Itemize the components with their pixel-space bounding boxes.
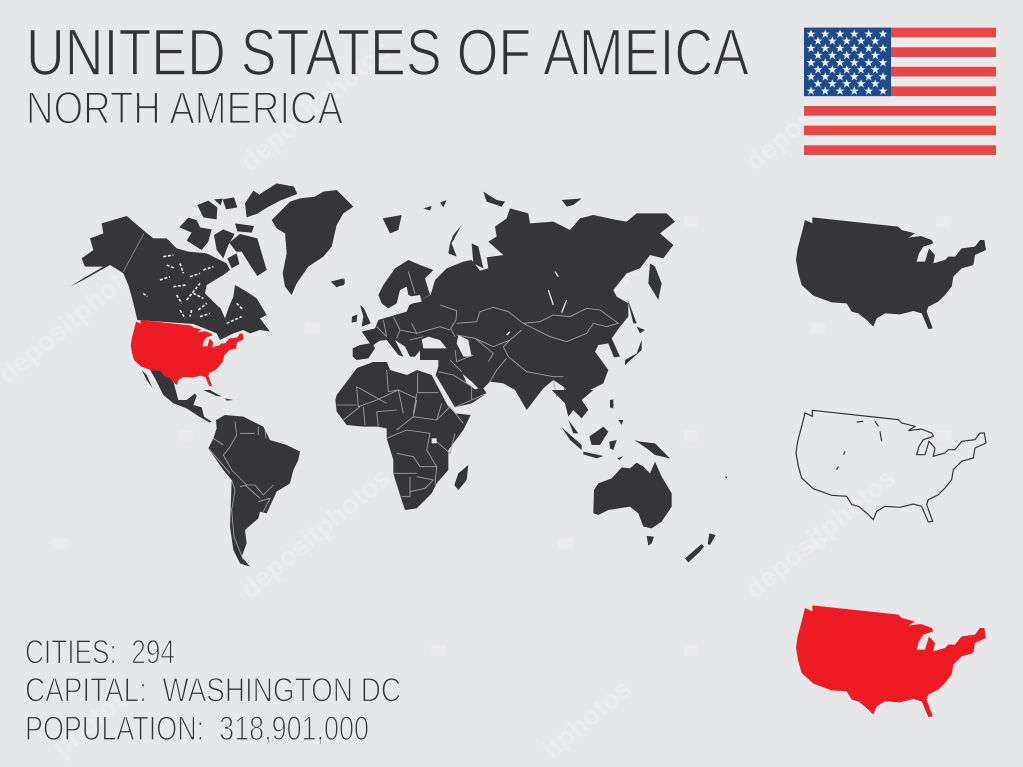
south america [208,415,300,567]
watermark: depositphotos [740,34,901,177]
africa [335,362,471,510]
world map [70,183,727,567]
north america [70,183,297,340]
southeast asia and oceania [552,390,727,562]
outlined usa silhouette [796,410,986,522]
title: UNITED STATES OF AMEICA [26,15,749,89]
subtitle: NORTH AMERICA [26,82,343,134]
watermark: itphotos [537,673,637,765]
eurasian islands [340,192,662,408]
greenland [272,190,353,295]
stat: cities: CITIES: 294 [25,634,175,672]
iceland [331,278,345,287]
new zealand [685,544,704,562]
watermark: photos [47,682,135,763]
tasmania [647,536,654,546]
flag [804,28,996,155]
stat: capital: CAPITAL: WASHINGTON DC [25,672,401,710]
solid dark usa silhouette [796,217,986,329]
highlighted: united states [131,320,244,386]
icon: lakes [143,255,243,323]
mexico and central america [142,367,233,423]
stat: population: POPULATION: 318,901,000 [25,710,369,748]
watermark: depositphotos [235,462,396,605]
alaska border [123,233,144,272]
eurasia [353,208,675,410]
watermark: depositphotos [487,250,648,393]
watermark: depositphotos [740,462,901,605]
madagascar [454,465,468,490]
watermark: depositphotos [235,34,396,177]
australia [593,462,672,528]
solid red usa silhouette [796,605,986,717]
